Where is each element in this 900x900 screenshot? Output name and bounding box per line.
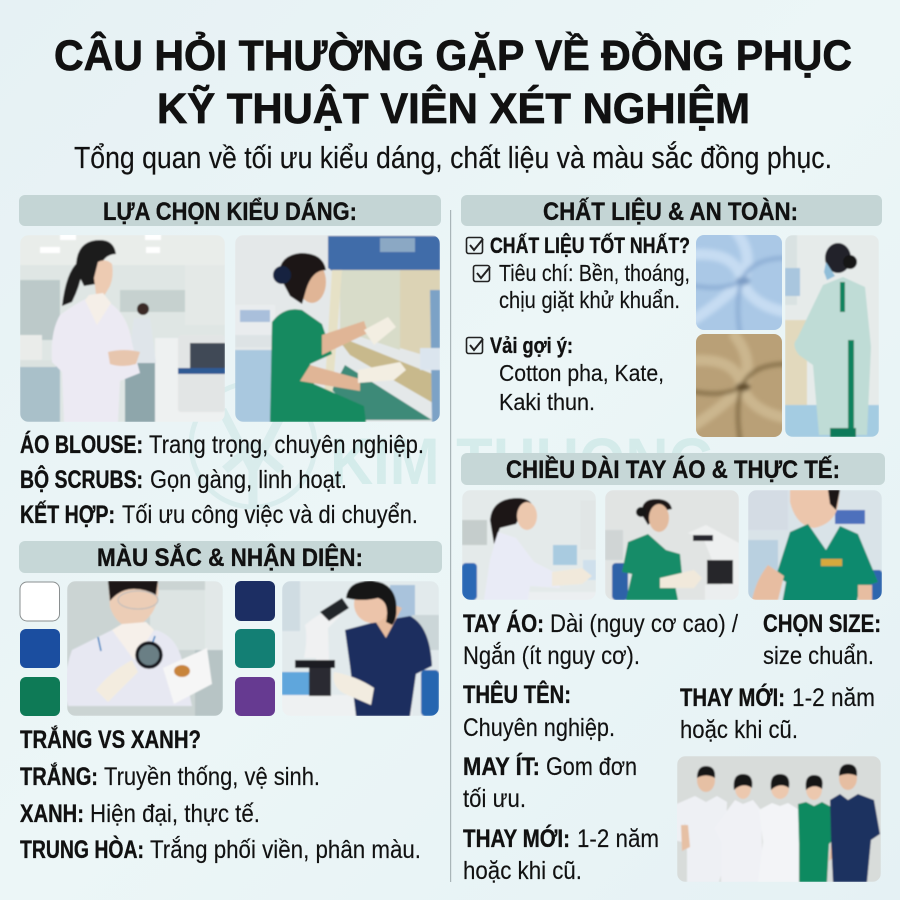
text: thay mới phải: THAY MỚI: [680,682,785,712]
title [54,31,852,133]
panel: màu sắc & nhận diện [19,541,442,864]
text: kiểu dáng: Gọn gàng, linh hoạt. [150,466,347,494]
text: tay áo: Dài (nguy cơ cao) / [550,610,738,638]
checkbox item: tiêu chí: chịu giặt khử khuẩn. [499,287,680,313]
checkbox item: vải gợi ý: Cotton pha, Kate, [499,360,664,386]
text: may ít [463,752,637,813]
title: KỸ THUẬT VIÊN XÉT NGHIỆM [157,84,750,133]
photo: tay dài blouse [462,490,596,600]
text: trắng vs xanh: TRẮNG VS XANH? [20,724,201,754]
watermark logo: KIM THUONG [330,424,715,498]
heading: chất liệu [461,195,882,226]
photo: áo xanh kính hiển vi [282,581,439,716]
photo: vải xanh [696,235,782,330]
heading: chiều dài tay áo: CHIỀU DÀI TAY ÁO & THỰC TẾ: [506,455,840,484]
text: may ít: MAY ÍT: [463,752,540,781]
text: trắng vs xanh: Trắng phối viền, phân màu. [150,835,421,864]
text: thay mới trái: 1-2 năm [577,825,659,853]
panel: lựa chọn kiểu dáng [19,195,441,529]
checkbox item: tiêu chí: Tiêu chí: Bền, thoáng, [499,260,690,286]
center divider [450,210,451,882]
heading: chất liệu: CHẤT LIỆU & AN TOÀN: [543,196,798,226]
photo: áo blouse [20,234,225,422]
text: trắng vs xanh [20,724,421,864]
text: thay mới phải [680,682,875,744]
text: thay mới trái: hoặc khi cũ. [463,857,582,885]
watermark logo [191,383,715,507]
photo: đội ngũ [672,756,881,882]
text: kiểu dáng: KẾT HỢP: [20,500,115,529]
checkbox item: vải gợi ý [466,333,664,415]
text: thay mới trái: THAY MỚI: [463,823,570,853]
photo: vải kaki [696,334,782,437]
panel: chiều dài tay áo & thực tế [461,453,885,885]
text: tay áo [463,609,738,670]
colour swatches left [20,582,60,716]
text: trắng vs xanh: Truyền thống, vệ sinh. [104,763,320,791]
text: kiểu dáng: Tối ưu công việc và di chuyển. [122,501,418,529]
title: CÂU HỎI THƯỜNG GẶP VỀ ĐỒNG PHỤC [54,31,852,80]
text: thay mới phải: hoặc khi cũ. [680,716,798,744]
checkbox item: vải gợi ý: Kaki thun. [499,389,595,415]
text: kiểu dáng: Trang trọng, chuyên nghiệp. [149,431,424,459]
heading: kiểu dáng: LỰA CHỌN KIỂU DÁNG: [103,197,357,226]
text: trắng vs xanh: Hiện đại, thực tế. [90,800,260,828]
text: thay mới phải: 1-2 năm [792,684,875,712]
text: tay áo: TAY ÁO: [463,609,544,638]
text: trắng vs xanh: TRẮNG: [20,761,98,791]
colour swatches right [235,581,275,716]
text: kiểu dáng [20,430,424,529]
text: trắng vs xanh: XANH: [20,800,84,828]
photo: áo trắng kính lúp [66,581,223,716]
heading: màu sắc [19,541,442,573]
checkbox item: tiêu chí [474,260,690,313]
text: trắng vs xanh: TRUNG HÒA: [20,834,144,864]
text: chọn size [763,610,881,670]
panel: chất liệu & an toàn [461,195,882,440]
text: chọn size: size chuẩn. [763,642,874,670]
heading: màu sắc: MÀU SẮC & NHẬN DIỆN: [97,542,363,572]
checkbox item: chất liệu tốt nhất: CHẤT LIỆU TỐT NHẤT? [490,232,690,258]
text: kiểu dáng: ÁO BLOUSE: [20,430,143,459]
heading: kiểu dáng [19,195,441,226]
photo: cận cảnh scrubs bảng tên [748,490,882,604]
photo: áo choàng [785,235,879,437]
text: thêu tên [463,679,615,742]
photo: bộ scrubs [235,235,440,422]
text: thay mới trái [463,823,659,885]
photo: tay ngắn scrubs [605,490,739,600]
text: kiểu dáng: BỘ SCRUBS: [20,464,143,494]
text: tay áo: Ngắn (ít nguy cơ). [463,641,640,670]
text: thêu tên: Chuyên nghiệp. [463,714,615,742]
text: may ít: Gom đơn [546,753,637,781]
checkbox item: vải gợi ý: Vải gợi ý: [490,333,573,358]
text: thêu tên: THÊU TÊN: [463,679,571,709]
text: may ít: tối ưu. [463,785,526,813]
